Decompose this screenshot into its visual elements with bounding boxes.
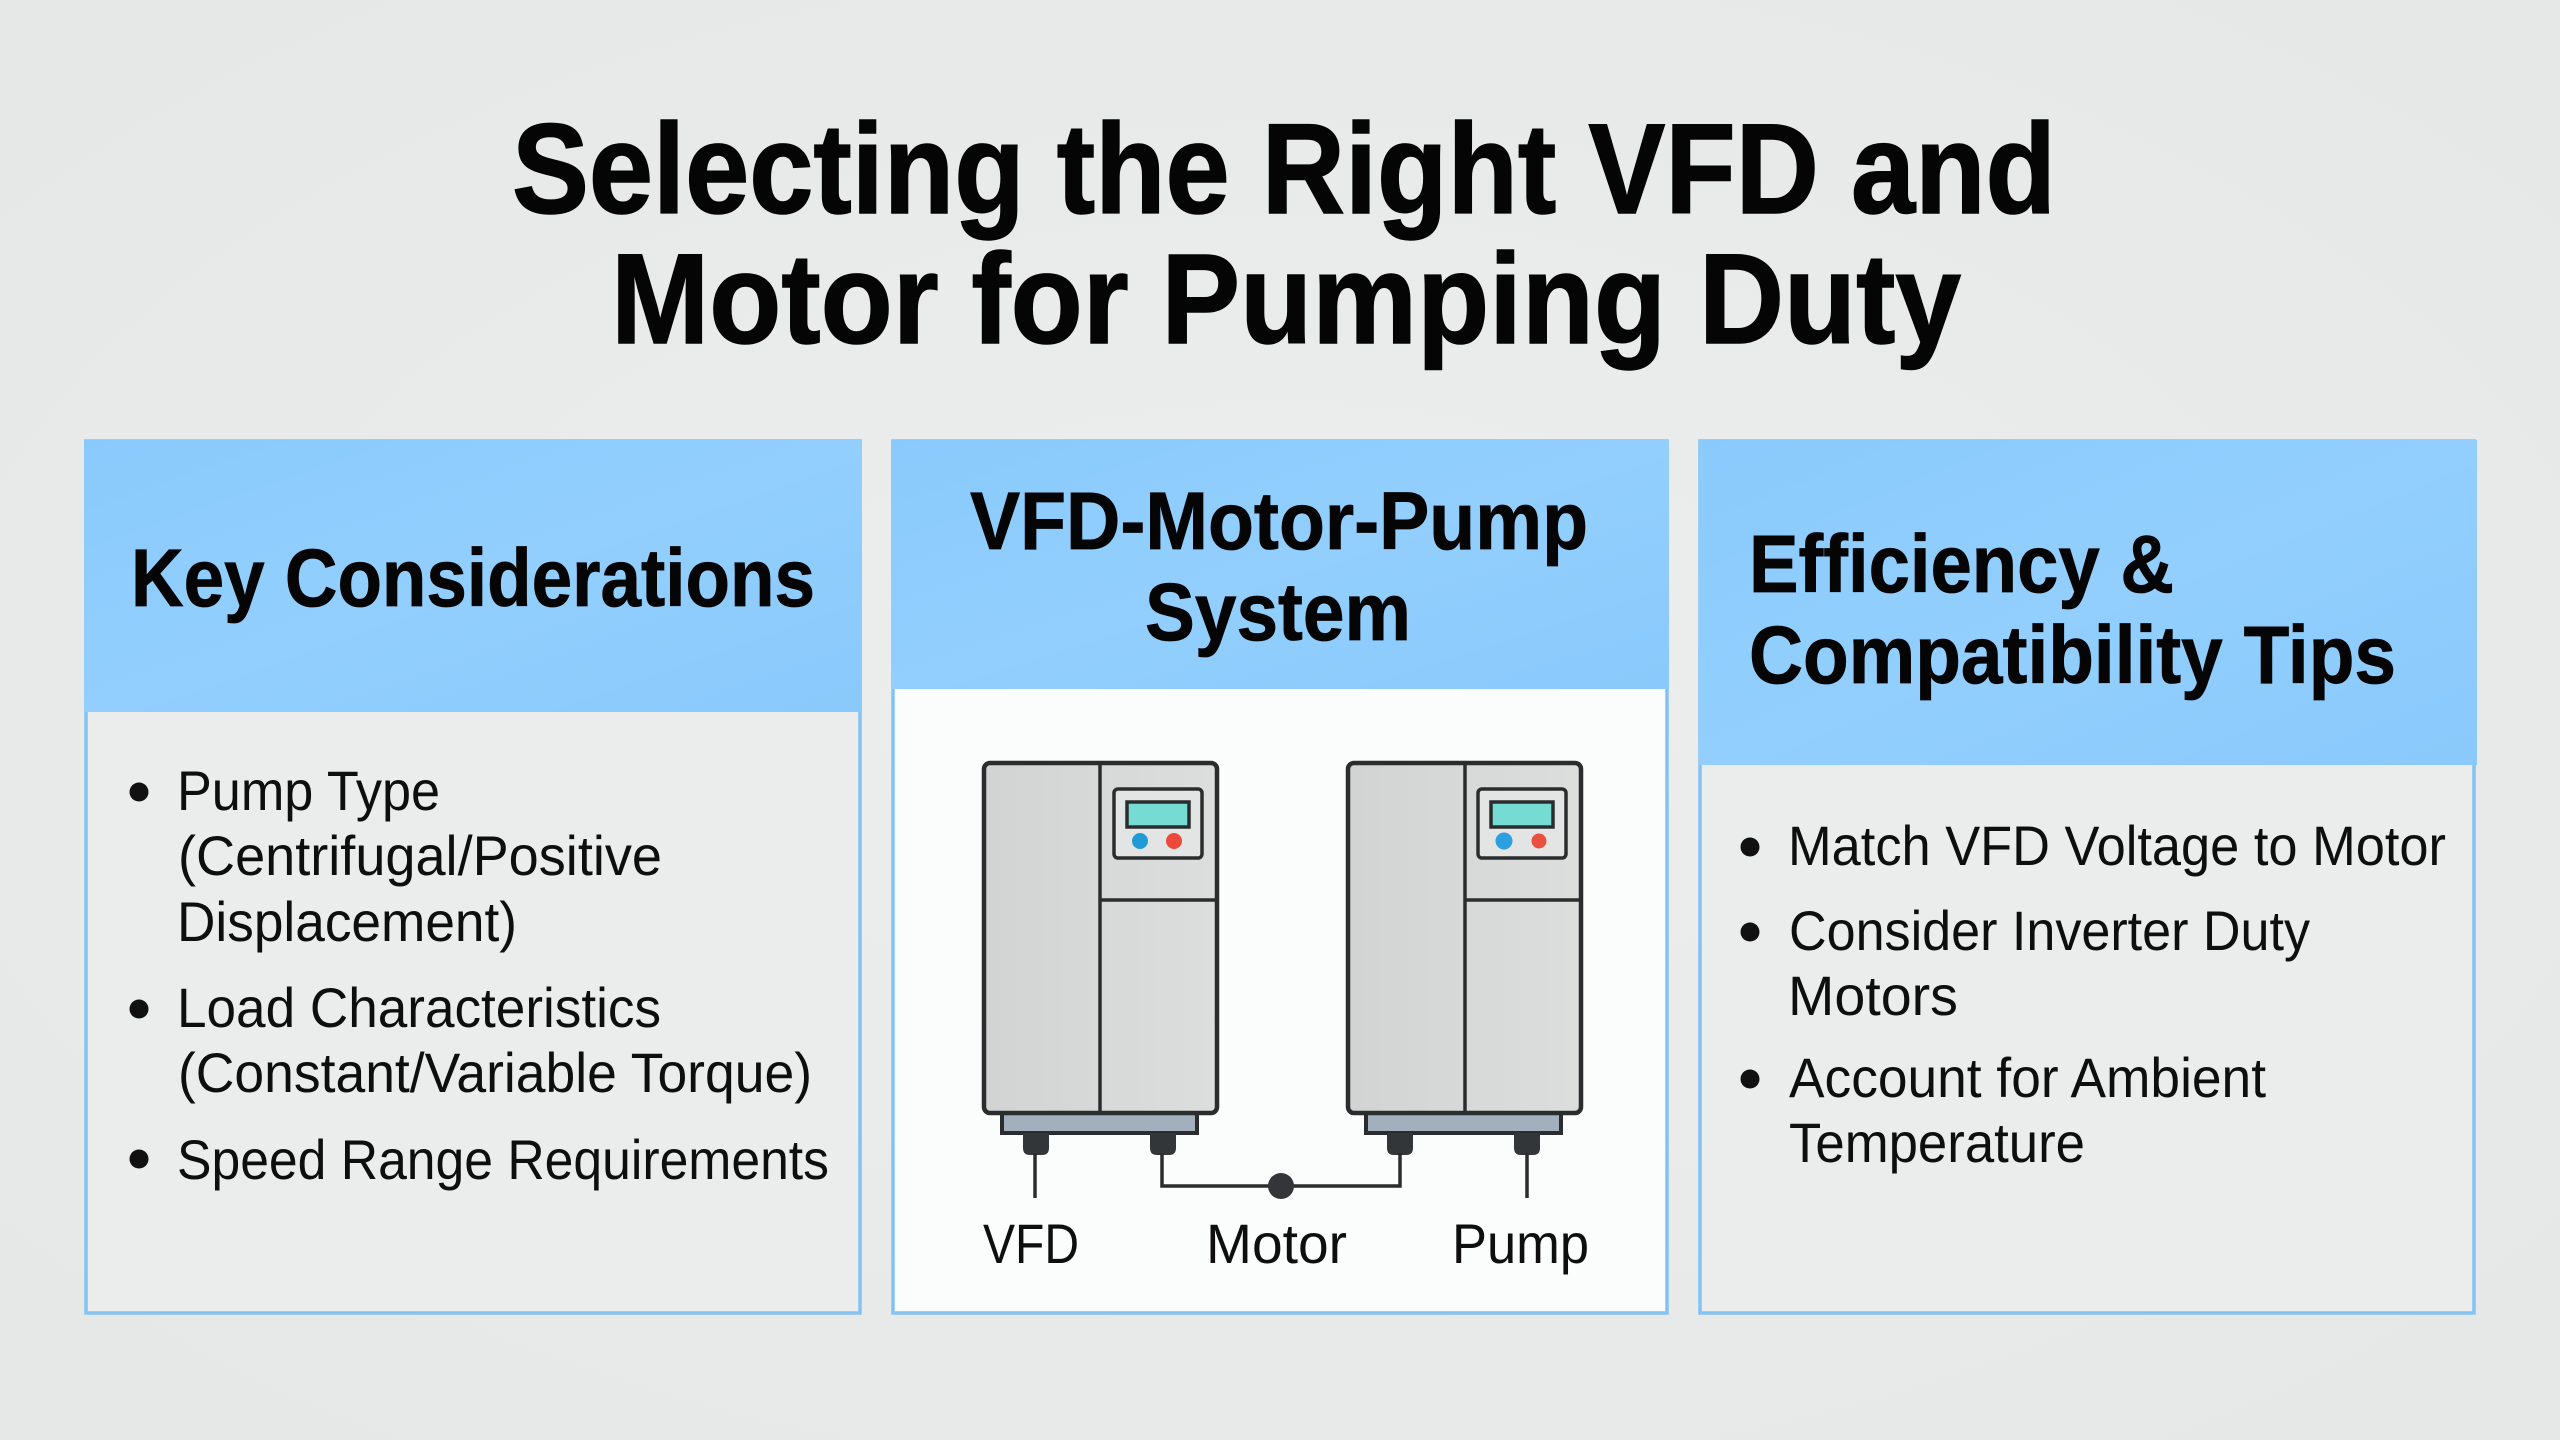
list: key considerations	[130, 759, 829, 1191]
diagram labels	[983, 1212, 1589, 1275]
heading panel: tips: Compatibility Tips	[1749, 610, 2396, 701]
list: key considerations: Displacement)	[177, 890, 517, 953]
heading panel: key considerations: Key Considerations	[131, 533, 815, 624]
list: key considerations: Load Characteristics	[177, 976, 661, 1039]
list: tips: Account for Ambient	[1789, 1046, 2266, 1109]
panel: VFD-motor-pump system	[891, 440, 1669, 1313]
list: tips: Match VFD Voltage to Motor	[1788, 814, 2446, 877]
panel: efficiency and compatibility tips	[1699, 440, 2477, 1313]
diagram: right drive cabinet	[1348, 763, 1581, 1133]
list: key considerations: (Centrifugal/Positive	[178, 824, 662, 887]
list: tips: Temperature	[1789, 1111, 2085, 1174]
title	[512, 98, 2056, 371]
diagram: left drive cabinet	[984, 763, 1217, 1133]
list: key considerations: Speed Range Requirements	[177, 1128, 829, 1191]
list: tips: Consider Inverter Duty	[1789, 899, 2310, 962]
heading panel: tips	[1699, 440, 2477, 765]
heading panel: system	[891, 440, 1669, 689]
diagram labels: Pump	[1452, 1212, 1589, 1275]
title: Motor for Pumping Duty	[611, 228, 1961, 371]
diagram: connectors and wiring	[1023, 1133, 1540, 1199]
panel: key considerations	[84, 440, 862, 1313]
list: tips: Motors	[1788, 964, 1958, 1027]
control panel right	[1478, 789, 1566, 858]
list: tips	[1740, 814, 2446, 1174]
heading panel: system: System	[1145, 567, 1411, 658]
diagram labels: VFD	[983, 1212, 1079, 1275]
list: key considerations: (Constant/Variable Torque)	[178, 1041, 812, 1104]
list: key considerations: Pump Type	[177, 759, 440, 822]
heading panel: key considerations	[84, 440, 862, 712]
diagram labels: Motor	[1206, 1212, 1347, 1275]
heading panel: tips: Efficiency &	[1749, 519, 2174, 610]
title: Selecting the Right VFD and	[512, 98, 2056, 241]
control panel left	[1114, 789, 1202, 858]
heading panel: system: VFD-Motor-Pump	[970, 476, 1588, 567]
